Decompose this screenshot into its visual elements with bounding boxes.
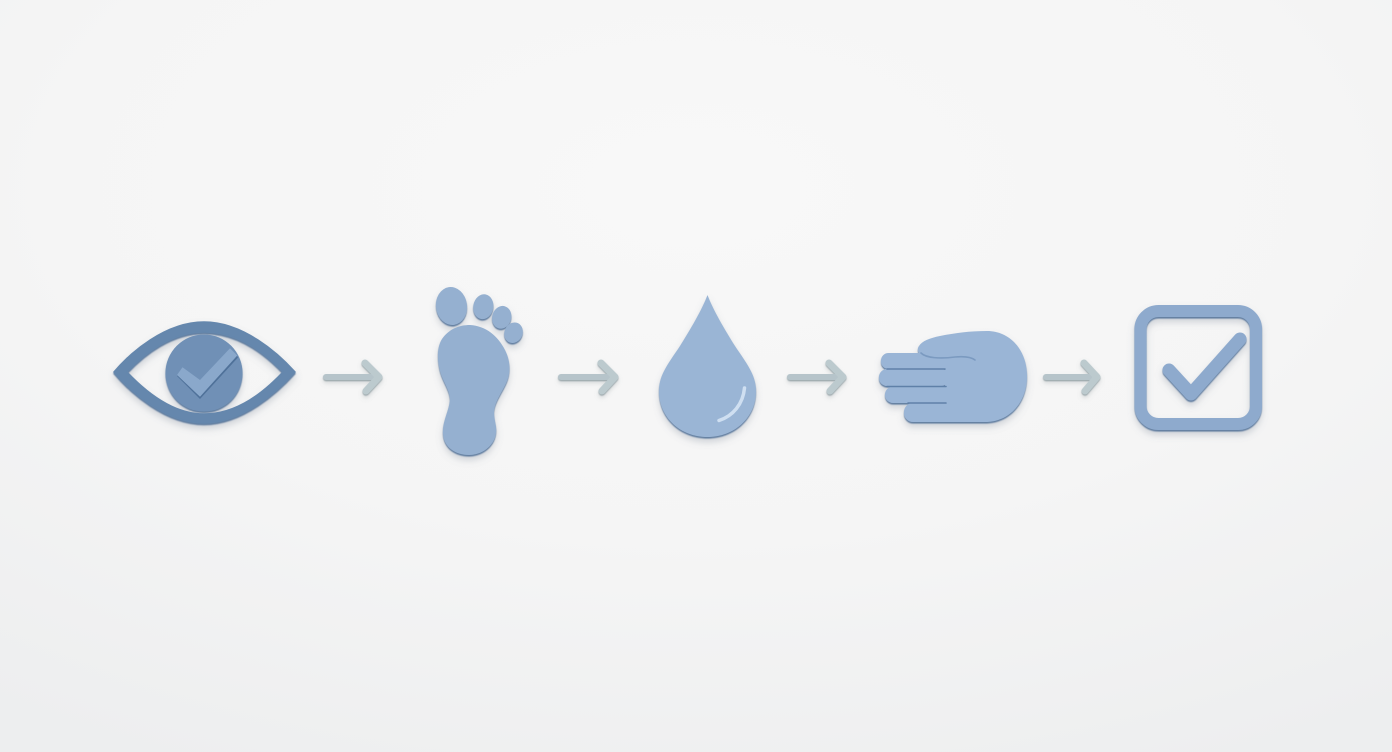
- icon: eye with check: [114, 322, 295, 423]
- finger gaps and thumb line: [887, 353, 975, 403]
- icon: hand: [879, 331, 1027, 422]
- hand silhouette: [879, 331, 1027, 422]
- checkbox frame: [1140, 311, 1256, 424]
- drop highlight: [719, 388, 744, 420]
- sole: [438, 325, 509, 455]
- icon: foot: [434, 285, 526, 455]
- arrow 4: [1046, 363, 1097, 391]
- icon: checkbox: [1140, 311, 1256, 424]
- arrow 2: [561, 363, 615, 391]
- icon: water drop: [659, 295, 756, 437]
- toe 4: [501, 319, 526, 346]
- eye outline: [114, 322, 295, 423]
- arrow 1: [326, 363, 379, 391]
- toe 2: [471, 293, 495, 321]
- toe 3: [490, 304, 514, 331]
- arrow 3: [790, 363, 843, 391]
- drop body: [659, 295, 756, 437]
- big toe: [434, 285, 469, 327]
- check mark: [1169, 339, 1240, 394]
- check mark on iris: [177, 348, 238, 399]
- iris circle: [166, 334, 242, 412]
